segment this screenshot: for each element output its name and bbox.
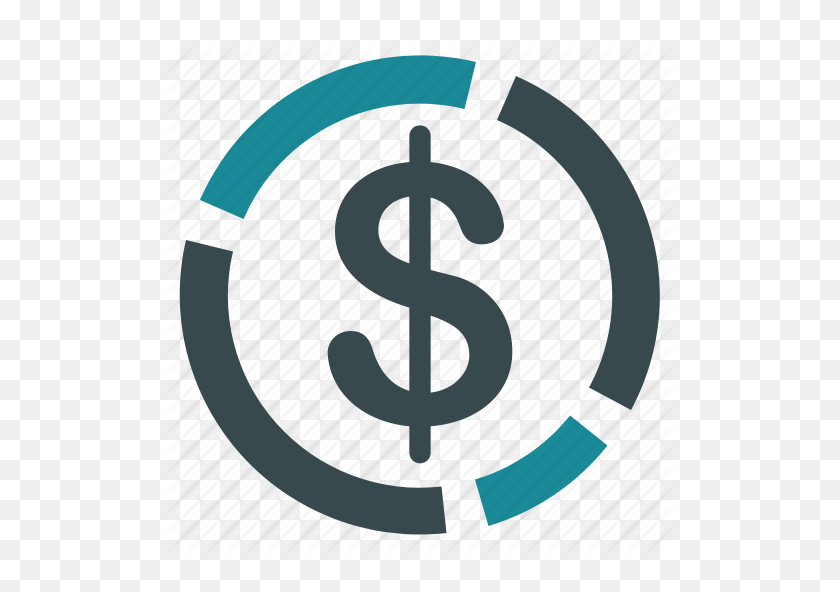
ring segment: right dark arc <box>497 76 660 410</box>
background: diagonal stripe texture <box>177 57 663 543</box>
icon: dollar diagram <box>180 55 660 534</box>
ring segment: left dark arc <box>180 240 447 534</box>
icon: dollar sign <box>328 125 512 463</box>
ring segment: bottom teal arc <box>475 416 608 526</box>
ring segment: top teal arc <box>200 55 476 219</box>
